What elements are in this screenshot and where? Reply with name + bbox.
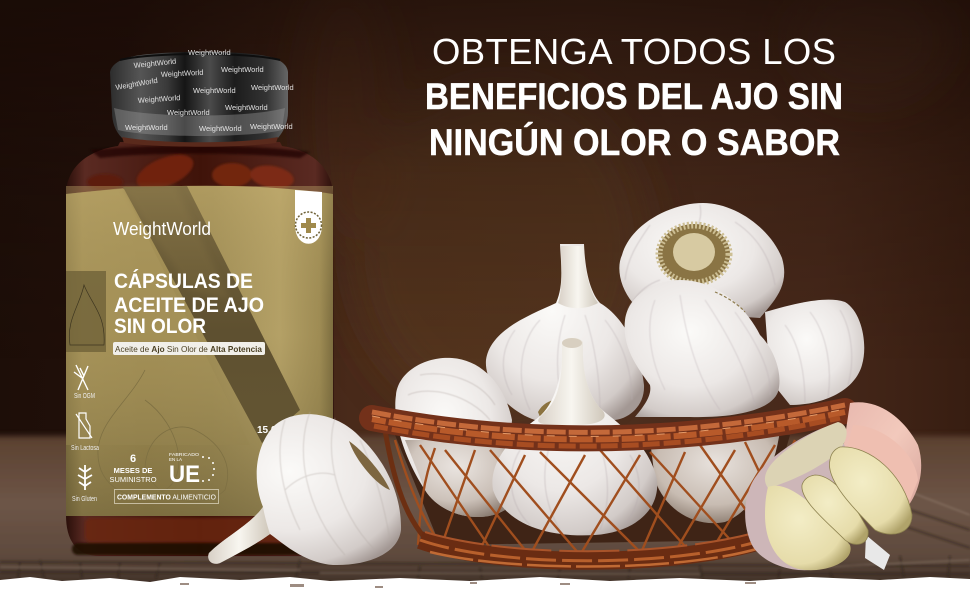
- cap: WeightWorld: [188, 48, 231, 57]
- basket base: [420, 530, 770, 567]
- cap: WeightWorld: [199, 124, 242, 133]
- cap: WeightWorld: [161, 68, 204, 79]
- headline: OBTENGA TODOS LOS: [432, 31, 836, 72]
- made in the EU mark: EN LA: [169, 457, 182, 462]
- garlic bulb: rear right: [765, 300, 864, 405]
- cap: WeightWorld: [138, 93, 181, 105]
- six month supply: [109, 453, 157, 484]
- icon: sin lactosa: Sin Lactosa: [71, 445, 99, 452]
- torn white paper edge: [0, 577, 970, 600]
- supplement box: [114, 490, 218, 504]
- dark diagonal band: [123, 186, 300, 443]
- made in the EU mark: [169, 452, 215, 488]
- label pattern panel: [66, 188, 250, 445]
- six month supply: 6: [130, 453, 136, 465]
- cap: WeightWorld: [250, 122, 293, 131]
- seal badge: [295, 190, 322, 244]
- icon: sin lactosa: [71, 413, 99, 452]
- headline: BENEFICIOS DEL AJO SIN: [425, 76, 843, 117]
- icon: sin OGM: Sin OGM: [74, 393, 95, 400]
- capsules visible through the glass: [72, 146, 312, 555]
- made in the EU mark: FABRICADO: [169, 452, 200, 457]
- headline: [425, 31, 843, 163]
- garlic bulb: rear left with stem: [486, 244, 644, 420]
- product name: SIN OLOR: [114, 315, 206, 338]
- basket rim: [372, 405, 845, 446]
- icon: sin gluten: Sin Gluten: [72, 496, 97, 503]
- cap: WeightWorld: [251, 83, 294, 92]
- garlic bulb: pink opened with cloves: [745, 402, 921, 570]
- basket interior shadow: [395, 435, 790, 545]
- brand: WeightWorld: WeightWorld: [113, 219, 211, 239]
- product name: [114, 270, 264, 338]
- glass jar: [66, 142, 334, 556]
- cap: WeightWorld: [193, 86, 236, 95]
- six month supply: SUMINISTRO: [109, 475, 157, 484]
- garlic bulb: basket left: [395, 358, 512, 517]
- cap: WeightWorld: [221, 65, 264, 74]
- gold label: [66, 186, 333, 516]
- subtitle pill: Aceite de Ajo Sin Olor de Alta Potencia: [115, 344, 262, 354]
- garlic bulb: lower right in basket: [650, 430, 780, 523]
- garlic bulb: front with stem in basket: [492, 338, 657, 535]
- headline: NINGÚN OLOR O SABOR: [429, 121, 840, 163]
- woven basket: [372, 405, 845, 567]
- icon: sin OGM: [74, 365, 95, 400]
- six month supply: MESES DE: [114, 466, 152, 475]
- faint garlic line art: [98, 370, 228, 502]
- cap: WeightWorld: [167, 108, 210, 117]
- cap: WeightWorld: [225, 103, 268, 112]
- product name: CÁPSULAS DE: [114, 270, 253, 293]
- garlic cloves: [765, 447, 912, 570]
- product name: ACEITE DE AJO: [114, 294, 264, 317]
- cap: WeightWorld: [125, 123, 168, 132]
- cap: WeightWorld: [133, 57, 177, 70]
- cap: [110, 48, 294, 147]
- made in the EU mark: UE: [169, 461, 200, 488]
- garlic sketch panel: [66, 271, 106, 352]
- icon: sin gluten: [72, 465, 97, 503]
- garlic bulb: rear top with root: [619, 203, 784, 318]
- supplement box: COMPLEMENTO ALIMENTICIO: [117, 494, 217, 502]
- basket lattice: [395, 440, 795, 555]
- garlic bulb: large front: [625, 280, 779, 417]
- wooden table: [0, 436, 970, 586]
- product bottle: [66, 48, 334, 556]
- partial weight text: 15,0: [257, 425, 277, 436]
- garlic bulb: large front-left on table: [208, 412, 401, 565]
- cap: WeightWorld: [115, 76, 158, 92]
